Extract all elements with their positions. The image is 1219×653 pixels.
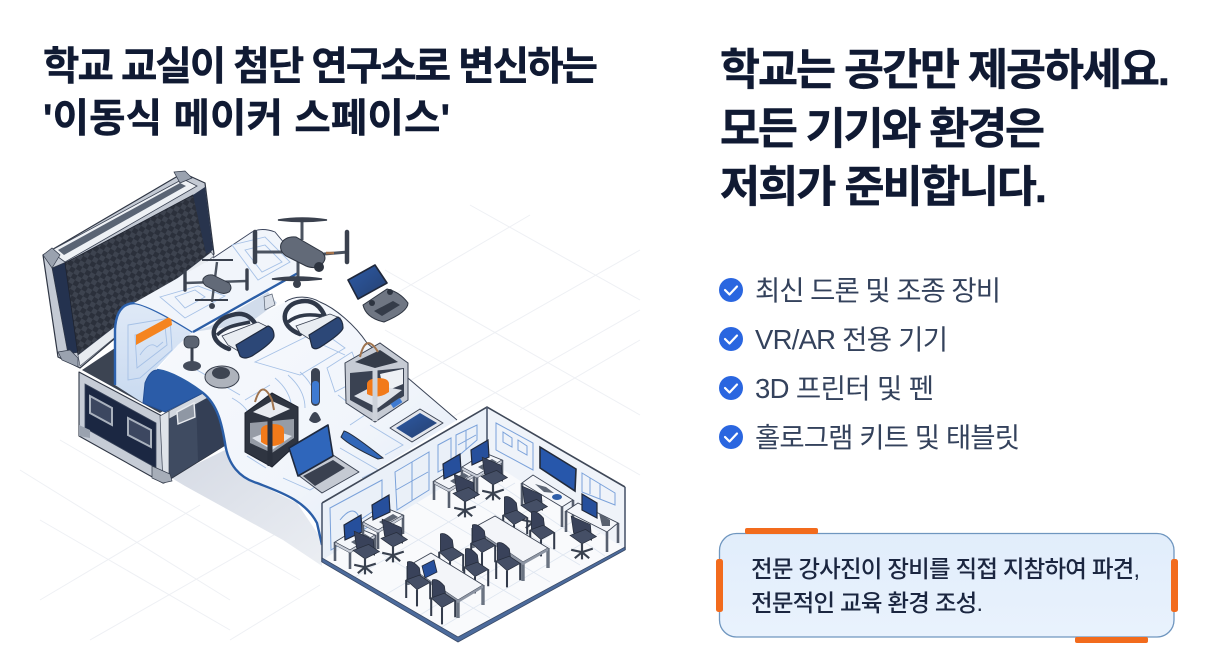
- floor shadow: [170, 450, 322, 566]
- illustration: mobile makerspace: [43, 171, 625, 642]
- icon: dark 3D printer: [245, 389, 298, 467]
- room floor: [322, 460, 625, 642]
- background isometric grid: [20, 205, 640, 640]
- title: left heading: 학교 교실이 첨단 연구소로 변신하는: [43, 45, 598, 89]
- icon: VR headset one: [214, 314, 274, 358]
- title: right heading: 학교는 공간만 제공하세요.: [720, 47, 1170, 95]
- meeting table two: [439, 533, 463, 578]
- paper: top sheet: [134, 230, 300, 332]
- icon: drone controller: [348, 265, 408, 322]
- flight case lid: [43, 171, 214, 368]
- icon: VR headset two: [285, 301, 343, 349]
- handles: [90, 396, 112, 425]
- item: hologram kit: 홀로그램 키트 및 태블릿: [755, 422, 1020, 453]
- item: drones: 최신 드론 및 조종 장비: [755, 275, 1001, 306]
- right wall: [487, 407, 625, 550]
- icon: large drone: [255, 218, 348, 288]
- icon: camera on stand: [183, 336, 201, 371]
- paper: vertical fold panel: [115, 303, 193, 403]
- icon: 3D pen: [341, 431, 383, 459]
- wall plans: [330, 423, 615, 550]
- paper: arch opening: [143, 370, 203, 412]
- checklist: [719, 275, 1020, 453]
- left wall: [322, 407, 488, 562]
- callout: [716, 528, 1178, 643]
- item: VR/AR: VR/AR 전용 기기: [755, 324, 948, 355]
- icon: small drone: [185, 260, 247, 309]
- flight case base: [79, 348, 227, 483]
- item: 3D printers: 3D 프린터 및 펜: [755, 373, 934, 404]
- paper: middle sheet: [157, 292, 457, 545]
- icon: round puck device: [205, 366, 239, 388]
- title: right heading: [720, 47, 1170, 212]
- title: right heading: 모든 기기와 환경은: [720, 106, 1045, 154]
- title: left heading: '이동식 메이커 스페이스': [43, 97, 450, 141]
- icon: hologram wand: [309, 368, 321, 423]
- computer desks: [434, 454, 474, 508]
- callout: 전문적인 교육 환경 조성.: [751, 590, 983, 616]
- title: left heading: [43, 45, 598, 141]
- icon: tablet: [390, 409, 443, 442]
- callout: 전문 강사진이 장비를 직접 지참하여 파견,: [751, 556, 1140, 582]
- orange accent bar: [136, 316, 172, 345]
- panel: classroom: [322, 407, 625, 642]
- latch: [177, 403, 195, 424]
- icon: silver 3D printer: [345, 343, 408, 422]
- icon: laptop: [289, 425, 359, 493]
- wall screen: [540, 447, 576, 491]
- title: right heading: 저희가 준비합니다.: [720, 164, 1047, 212]
- room base rim: [322, 547, 625, 642]
- long desks: [522, 483, 573, 527]
- meeting table one: [503, 496, 527, 541]
